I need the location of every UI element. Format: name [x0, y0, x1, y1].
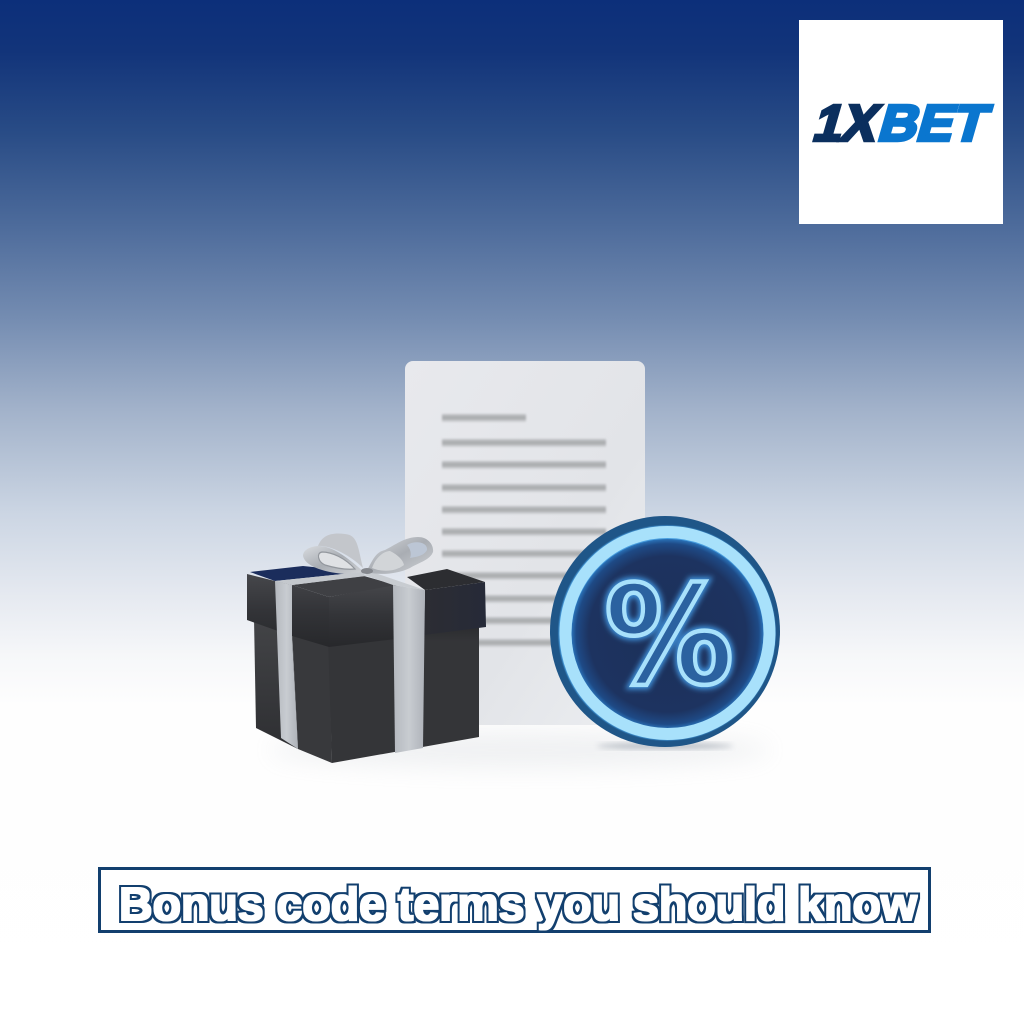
ribbon: top bands	[275, 572, 425, 590]
illustration: document, gift and percent badge	[247, 361, 780, 768]
ribbon: left band	[275, 581, 298, 749]
neon ring	[566, 532, 770, 734]
icon: gift box	[247, 534, 486, 763]
badge glow	[558, 526, 776, 740]
percent symbol: %	[604, 557, 734, 716]
logo wordmark: 1XBET	[808, 95, 996, 152]
box front-left face	[292, 630, 332, 763]
ground shadows	[270, 732, 770, 768]
title box	[100, 868, 930, 932]
badge body edge	[550, 516, 780, 747]
box front face	[328, 625, 479, 763]
logo wordmark: 1XBET: BET	[873, 95, 996, 152]
document sheet	[405, 361, 645, 725]
bow	[303, 534, 433, 574]
icon: percent badge	[550, 516, 780, 747]
logo panel	[799, 20, 1003, 224]
box left face	[254, 618, 298, 749]
ribbon: right band	[393, 585, 425, 753]
title text: Bonus code terms you should know	[119, 878, 917, 930]
percent symbol glow: %	[604, 557, 734, 716]
badge face	[572, 539, 764, 729]
logo wordmark: 1XBET: 1X	[808, 95, 886, 152]
lid	[247, 566, 486, 647]
document text lines	[442, 414, 606, 647]
